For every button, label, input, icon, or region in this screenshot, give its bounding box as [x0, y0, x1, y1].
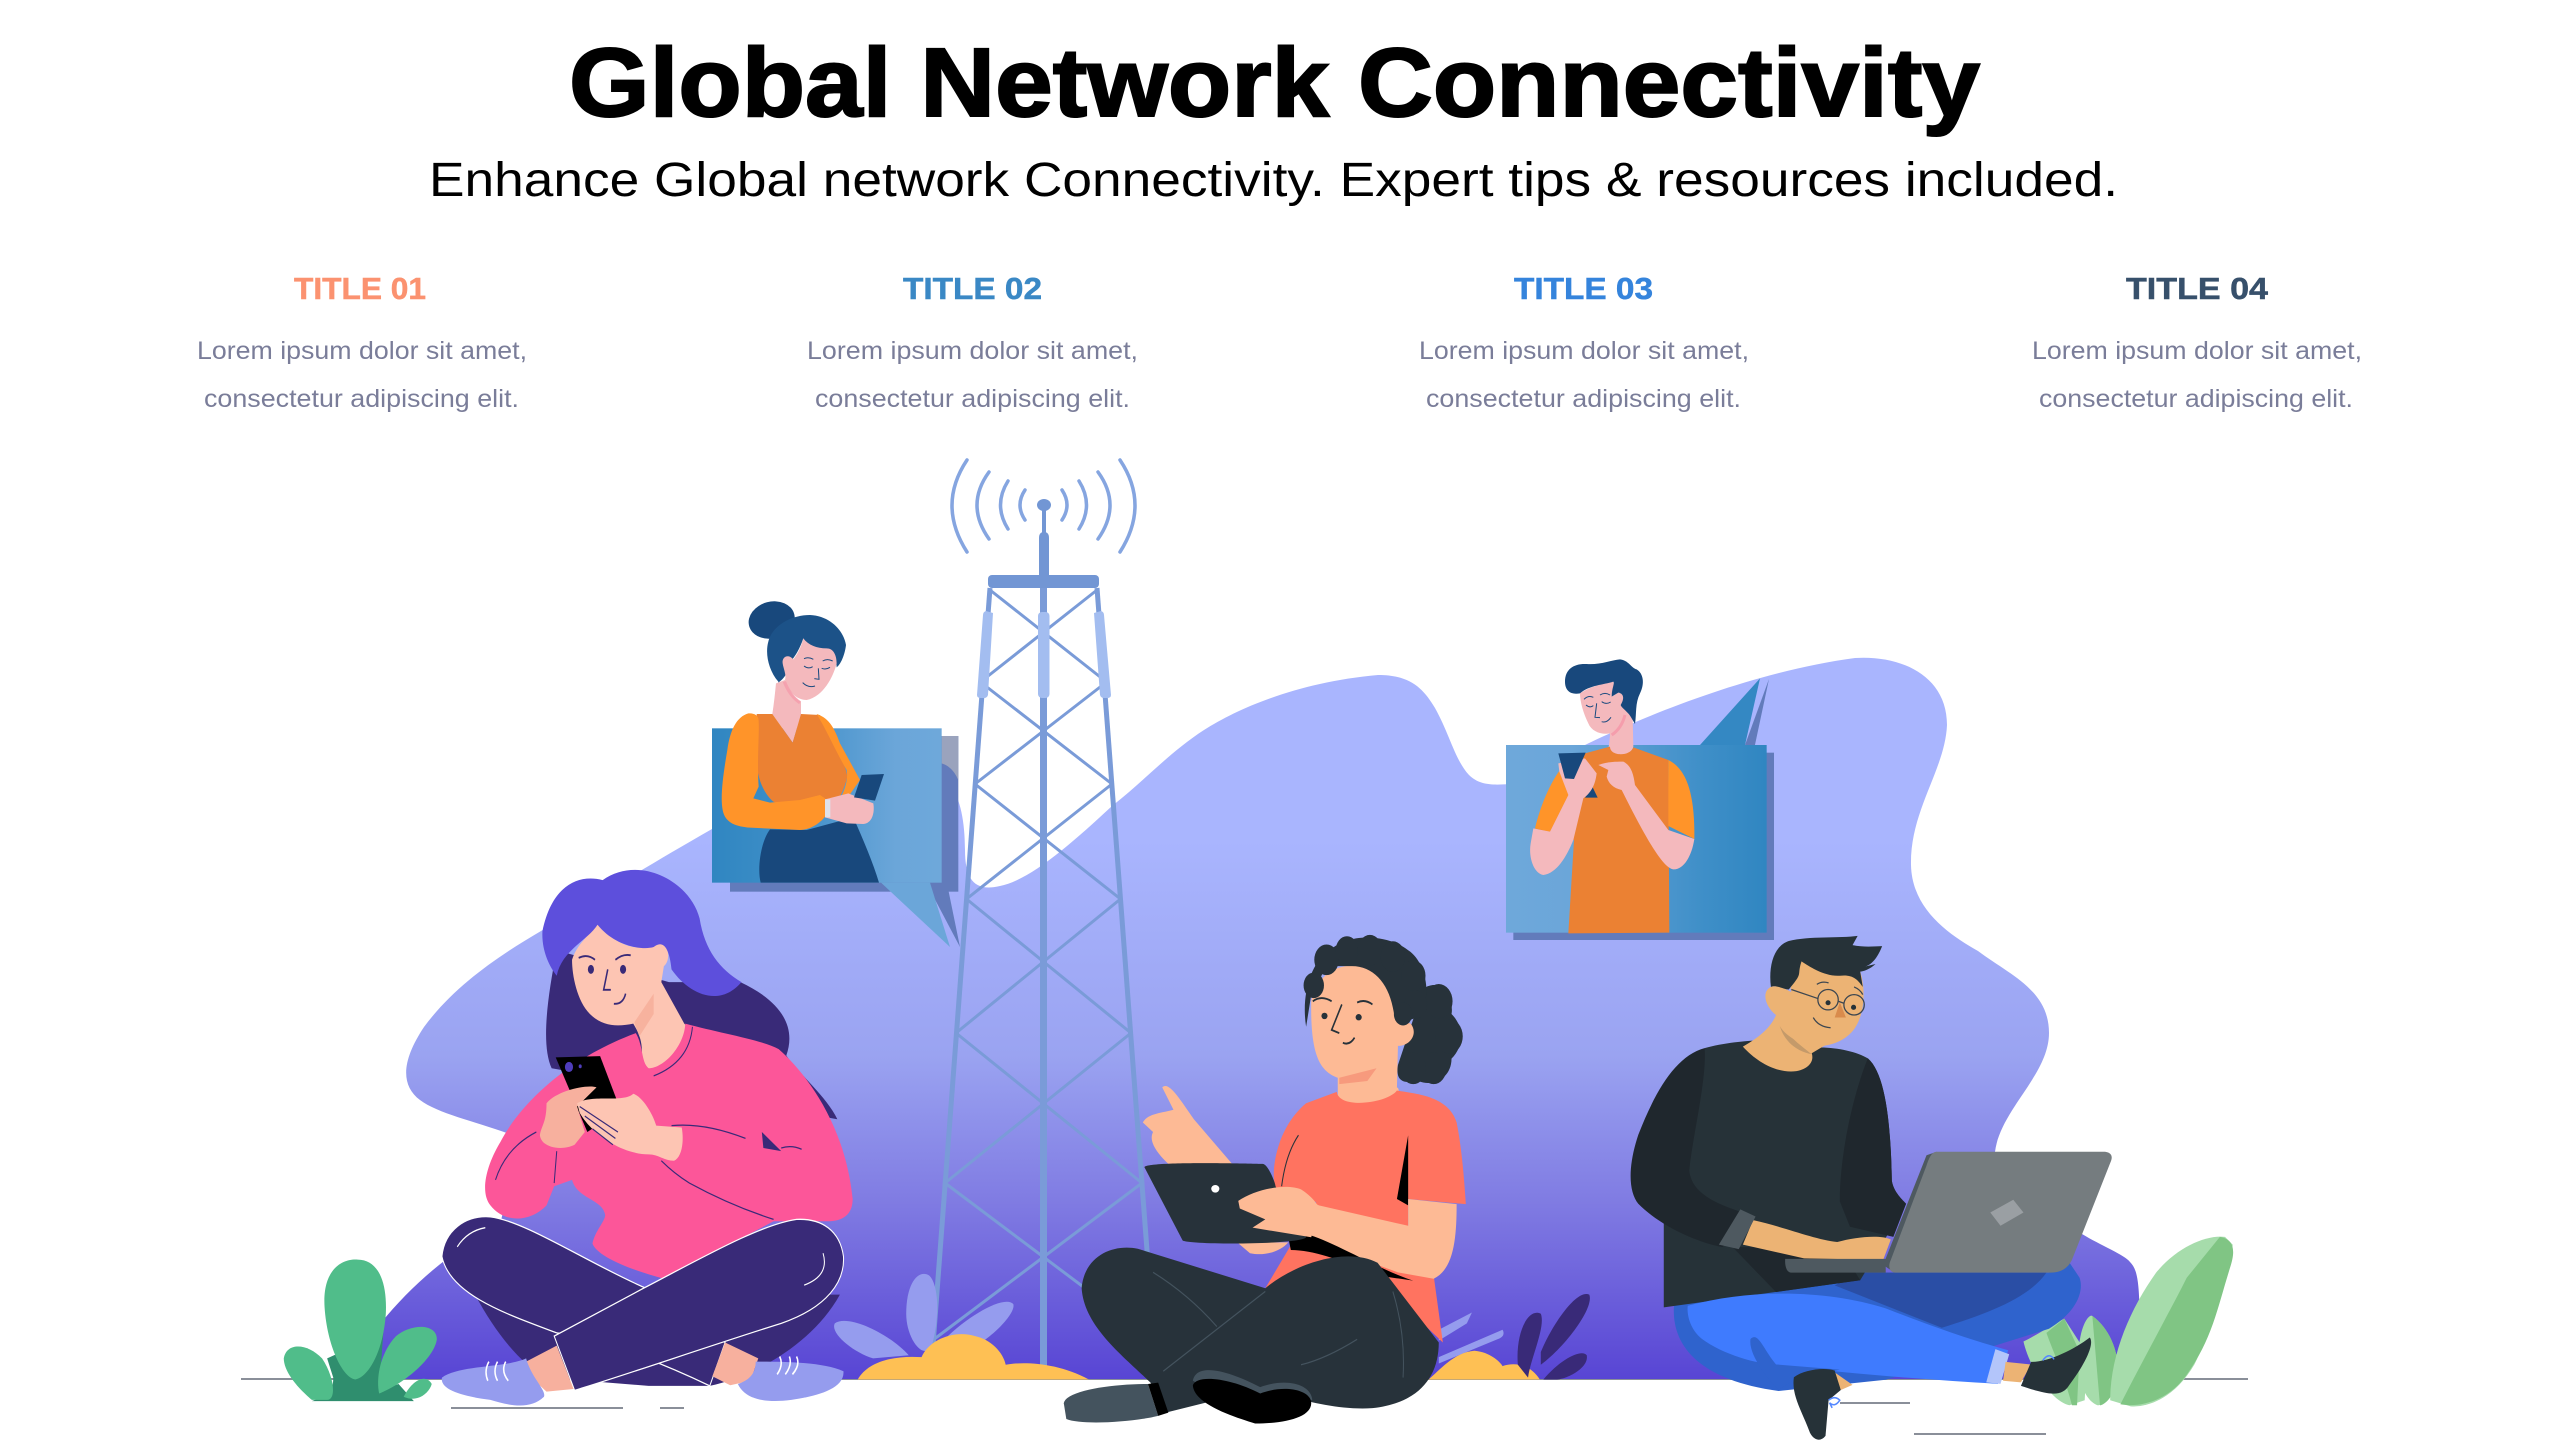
- shoes: [1064, 1370, 1312, 1423]
- woman figure: [722, 596, 884, 883]
- person: girl with tablet: [1064, 935, 1466, 1423]
- column 2: title 02: Lorem ipsum dolor sit amet,: [807, 337, 1138, 365]
- column 4: title 04: TITLE 04: [2126, 271, 2269, 306]
- column 2: title 02: consectetur adipiscing elit.: [815, 385, 1130, 413]
- legs: [475, 1295, 840, 1386]
- bubble body: [712, 728, 950, 947]
- subtitle: Enhance Global network Connectivity. Expert tips & resources included.: [429, 154, 2118, 207]
- tower lattice: [933, 588, 1154, 1345]
- column 1: title 01: [197, 271, 527, 413]
- column 4: title 04: [2032, 271, 2362, 413]
- person: girl with phone in pink sweater: [442, 870, 853, 1405]
- column 2: title 02: [807, 271, 1138, 413]
- column 2: title 02: TITLE 02: [903, 271, 1042, 306]
- plant: purple and yellow foliage right of tablet girl: [1429, 1294, 1590, 1379]
- front curly hair: [1304, 935, 1427, 1027]
- column 3: title 03: TITLE 03: [1514, 271, 1653, 306]
- ground lines: [241, 1379, 2248, 1434]
- sleeves: [1631, 1048, 1756, 1247]
- tablet: [1144, 1163, 1306, 1243]
- column 4: title 04: consectetur adipiscing elit.: [2039, 385, 2353, 413]
- bubble shadow: [730, 736, 960, 947]
- tower mast: [1040, 588, 1047, 1368]
- laptop: [1785, 1152, 2112, 1273]
- plant: purple leaves and yellow bush by tower: [834, 1274, 1089, 1379]
- back hair: [546, 950, 837, 1119]
- face and neck: [572, 923, 688, 1069]
- pointing hand: [1143, 1086, 1232, 1164]
- arm and fold: [1273, 1196, 1457, 1279]
- jeans front: [1688, 1294, 2008, 1384]
- man figure: [1530, 659, 1694, 933]
- column 4: title 04: Lorem ipsum dolor sit amet,: [2032, 337, 2362, 365]
- jeans back: [1674, 1262, 2081, 1391]
- bubble body: [1506, 678, 1767, 933]
- title: Global Network Connectivity: [569, 28, 1980, 137]
- column 3: title 03: [1419, 271, 1749, 413]
- column 1: title 01: consectetur adipiscing elit.: [204, 385, 519, 413]
- column 3: title 03: Lorem ipsum dolor sit amet,: [1419, 337, 1749, 365]
- speech bubble with man: [1506, 659, 1774, 940]
- person: man with laptop: [1631, 936, 2112, 1440]
- tower top pole: [1037, 499, 1051, 575]
- shoes and ankles: [442, 1342, 844, 1405]
- signal arcs: [952, 460, 1135, 552]
- neck and head: [1743, 1007, 1824, 1072]
- column 1: title 01: Lorem ipsum dolor sit amet,: [197, 337, 527, 365]
- torso: [1664, 1041, 1906, 1307]
- tower antennas: [977, 611, 1111, 698]
- bubble shadow: [1513, 679, 1774, 940]
- hand on tablet: [1238, 1187, 1319, 1237]
- plant: green leaves on left: [284, 1259, 437, 1401]
- column 1: title 01: TITLE 01: [294, 271, 426, 306]
- column 3: title 03: consectetur adipiscing elit.: [1426, 385, 1741, 413]
- background blob: [342, 658, 2140, 1379]
- shoes: [1793, 1337, 2091, 1440]
- front hair: [542, 870, 741, 996]
- arm: [1743, 1220, 1891, 1260]
- tower platform: [988, 575, 1099, 588]
- t-shirt: [1265, 1091, 1466, 1342]
- sweater: [485, 1024, 853, 1279]
- legs: [1082, 1248, 1439, 1413]
- face and neck: [1311, 966, 1414, 1112]
- signal tower: [933, 460, 1154, 1368]
- hair bun: [1397, 984, 1463, 1084]
- lower fingers under tablet: [1237, 1242, 1288, 1254]
- speech bubble with woman: [712, 596, 960, 947]
- phone: [556, 1056, 621, 1132]
- glasses and face details: [1791, 982, 1864, 1028]
- plant: green leaves at right: [2023, 1237, 2233, 1406]
- hands: [540, 1087, 597, 1148]
